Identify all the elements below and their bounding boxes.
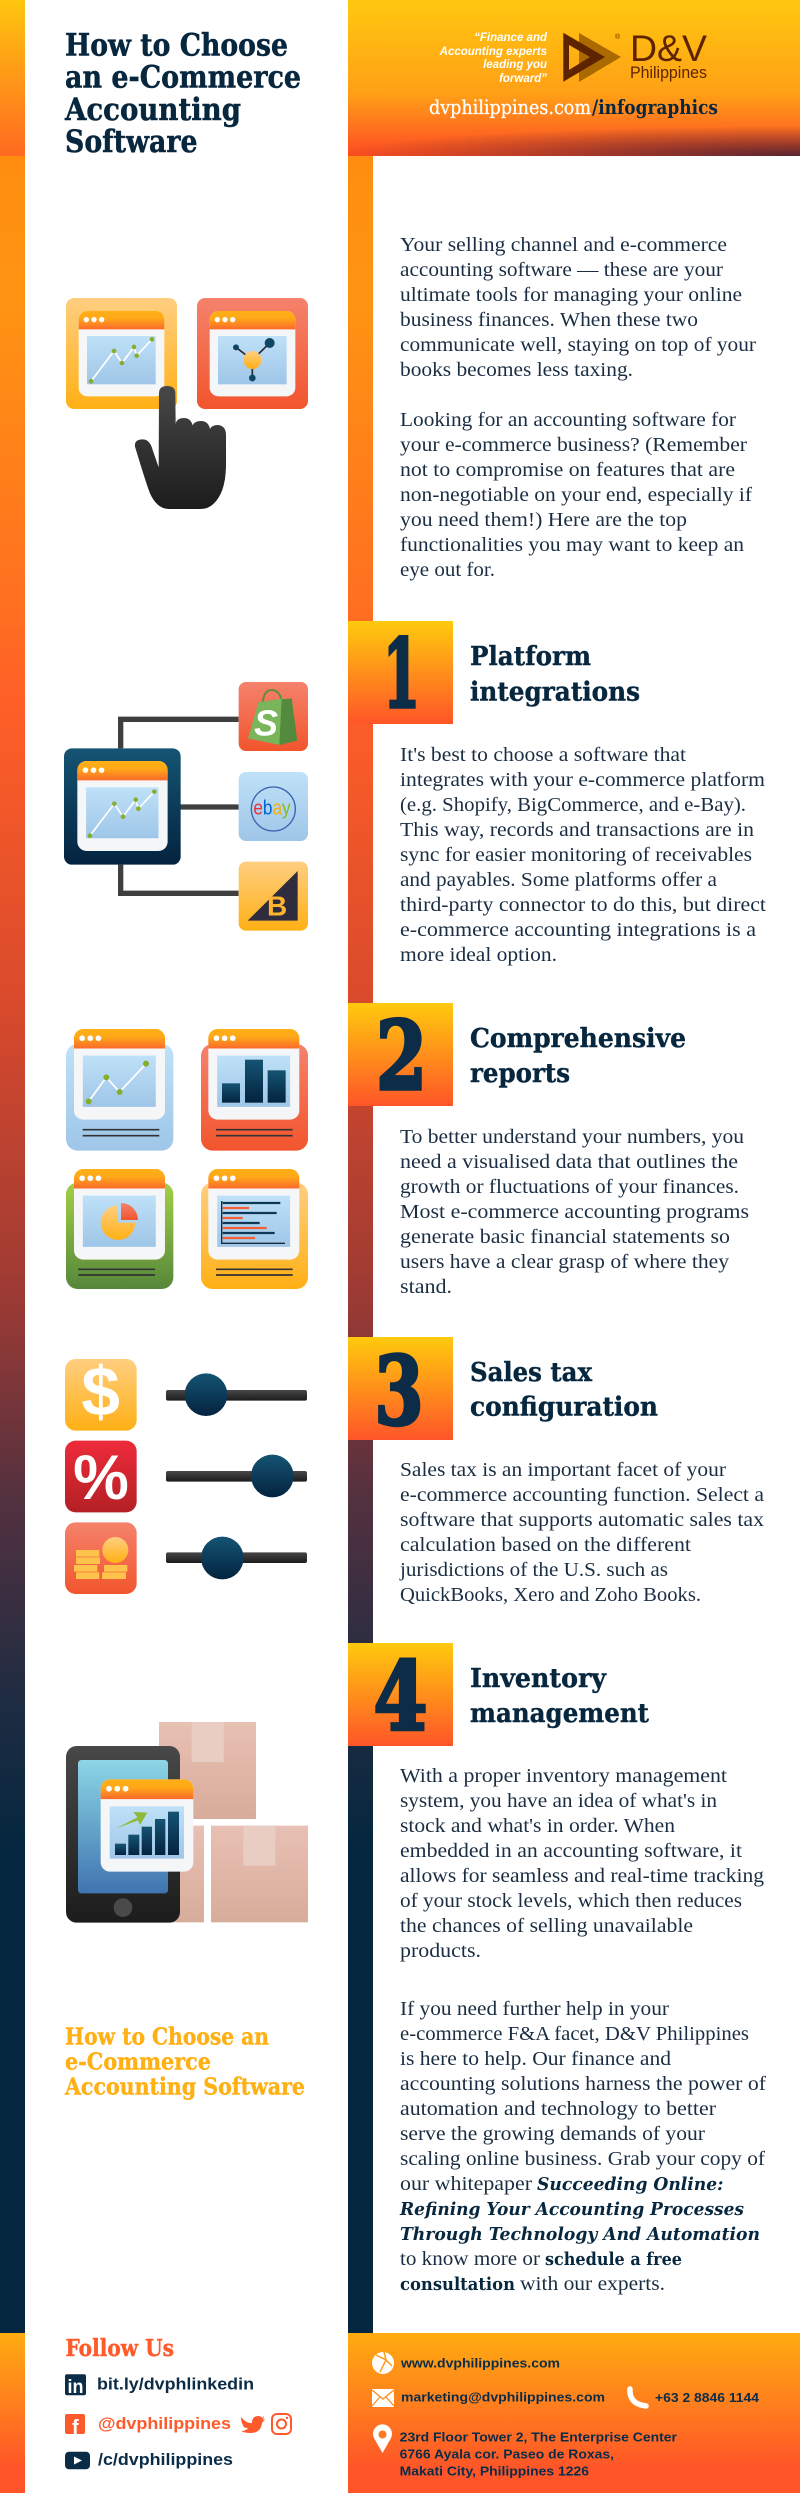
section 3: number badge: 3 (374, 1336, 424, 1447)
main title (64, 28, 301, 160)
section 4: body text: of your stock levels, which then reduces (400, 1890, 742, 1912)
closing paragraph: accounting solutions harness the power of (400, 2073, 766, 2095)
phone row (630, 2389, 760, 2406)
section 2: number badge (348, 1001, 453, 1112)
header band with logo and URL (348, 0, 800, 156)
section 4: body text (400, 1765, 764, 1962)
section 4: heading (470, 1664, 649, 1729)
logo: ® (615, 33, 621, 41)
footer left stripe (0, 2333, 25, 2493)
icon: BigCommerce: B (267, 890, 287, 921)
section 4: body text: allows for seamless and real-time tracking (400, 1865, 764, 1887)
section 1: number badge: 1 (383, 619, 420, 730)
section 4: number badge (348, 1642, 453, 1752)
closing paragraph: schedule a free (545, 2249, 682, 2270)
social handle row: f (72, 2417, 79, 2439)
section 3: heading: Sales tax (470, 1358, 592, 1388)
icon: two app tiles and pointing hand (66, 298, 308, 509)
section 3: number badge (348, 1336, 453, 1447)
intro text: non-negotiable on your end, especially if (400, 484, 752, 506)
closing paragraph: Refining Your Accounting Processes (399, 2199, 744, 2220)
intro text: Your selling channel and e-commerce (400, 234, 727, 256)
website URL (429, 95, 718, 119)
section 4: body text: system, you have an idea of what's in (400, 1790, 717, 1812)
website row (372, 2352, 560, 2374)
section 2: body text: growth or fluctuations of your finances. (400, 1176, 739, 1198)
section 3: body text (399, 1459, 764, 1606)
main title: Accounting (64, 92, 241, 128)
email row (372, 2389, 605, 2407)
section 1: heading: integrations (470, 677, 640, 707)
closing paragraph: is here to help. Our finance and (400, 2048, 671, 2070)
address row: 23rd Floor Tower 2, The Enterprise Center (400, 2430, 677, 2445)
intro text: not to compromise on features that are (400, 459, 735, 481)
section 4: number badge: 4 (374, 1642, 428, 1752)
section 2: body text: generate basic financial statements so (400, 1226, 730, 1248)
intro text: books becomes less taxing. (400, 359, 633, 381)
intro text: you need them!) Here are the top (400, 509, 687, 531)
address row: 6766 Ayala cor. Paseo de Roxas, (400, 2446, 614, 2461)
section 4: body text: embedded in an accounting software, it (400, 1840, 742, 1862)
accounting window tile (64, 748, 181, 865)
icon: dollar tile: $ (81, 1353, 120, 1431)
section 1: body text: more ideal option. (400, 944, 557, 966)
intro text: business finances. When these two (400, 309, 698, 331)
main title: How to Choose (65, 28, 288, 64)
section 3: body text: software that supports automatic sales tax (400, 1509, 764, 1531)
section 4: body text: stock and what's in order. When (400, 1815, 675, 1837)
section 1: body text: It's best to choose a software that (400, 744, 686, 766)
follow us heading: Follow Us (66, 2335, 174, 2362)
tagline (439, 32, 548, 85)
section 3: body text: e-commerce accounting function. Select a (400, 1484, 764, 1506)
intro text: Looking for an accounting software for (400, 409, 736, 431)
icon: Shopify: S (254, 702, 278, 743)
closing paragraph: consultation (400, 2274, 515, 2295)
tagline: forward” (499, 73, 547, 85)
social handle row: @dvphilippines (98, 2414, 231, 2433)
intro text (400, 234, 756, 581)
section 1: body text: and payables. Some platforms offer a (400, 869, 717, 891)
closing paragraph: with our experts. (520, 2273, 665, 2295)
section 3: body text: Sales tax is an important facet of your (400, 1459, 726, 1481)
tile: network window (197, 298, 308, 409)
section 3: heading: configuration (470, 1393, 658, 1423)
top left stripe (0, 0, 25, 156)
section 4: heading: management (470, 1699, 649, 1729)
section 4: body text: products. (400, 1940, 481, 1962)
closing paragraph: serve the growing demands of your (400, 2123, 705, 2145)
logo: D&V (630, 28, 707, 69)
section 3: body text: QuickBooks, Xero and Zoho Books. (400, 1584, 701, 1606)
section 1: body text: integrates with your e-commerce platform (400, 769, 765, 791)
slider 3 (166, 1537, 307, 1579)
closing paragraph: Through Technology And Automation (400, 2224, 760, 2245)
closing paragraph: automation and technology to better (400, 2098, 716, 2120)
website URL: /infographics (592, 95, 718, 119)
youtube row: /c/dvphilippines (98, 2450, 233, 2469)
icon: coins tile (65, 1522, 137, 1594)
closing paragraph (399, 1998, 766, 2295)
card: horizontal bars (201, 1169, 308, 1289)
section 1: body text: e-commerce accounting integrations is a (400, 919, 756, 941)
card: bar chart (201, 1029, 308, 1151)
tagline: leading you (483, 59, 547, 71)
slider 1 (166, 1373, 307, 1416)
section 4: heading: Inventory (470, 1664, 607, 1694)
footer: follow us (65, 2335, 291, 2469)
phone row: +63 2 8846 1144 (655, 2390, 760, 2405)
left gradient stripe (0, 156, 25, 2333)
section 1: body text: third-party connector to do this, but direct (400, 894, 766, 916)
linkedin row (65, 2374, 254, 2398)
icon: BigCommerce (239, 862, 308, 931)
icon: eBay: ebay (253, 797, 291, 819)
logo: Philippines (630, 64, 707, 82)
social handle row (65, 2414, 291, 2439)
linkedin row: in (68, 2377, 84, 2398)
section 2: body text: need a visualised data that outlines the (400, 1151, 738, 1173)
address row (373, 2424, 677, 2478)
illustration: tax sliders (65, 1353, 307, 1594)
closing paragraph: e-commerce F&A facet, D&V Philippines (400, 2023, 749, 2045)
closing paragraph: Succeeding Online: (537, 2174, 724, 2195)
section 1: number badge (348, 619, 453, 730)
tagline: Accounting experts (439, 46, 547, 58)
section 2: body text: users have a clear grasp of where they (400, 1251, 729, 1273)
section 2: body text (400, 1126, 749, 1298)
intro text: communicate well, staying on top of your (400, 334, 756, 356)
intro text: eye out for. (400, 559, 495, 581)
tagline: “Finance and (474, 32, 548, 44)
section 3: body text: jurisdictions of the U.S. such as (399, 1559, 668, 1581)
illustration: platform integrations (64, 682, 308, 931)
logo (563, 28, 707, 82)
section 1: heading: Platform (470, 642, 591, 672)
closing paragraph: If you need further help in your (400, 1998, 669, 2020)
section 4: body text: With a proper inventory management (400, 1765, 727, 1787)
intro text: accounting software — these are your (400, 259, 723, 281)
illustration: report cards (66, 1029, 308, 1289)
section 3: heading (470, 1358, 658, 1423)
section 3: body text: calculation based on the different (400, 1534, 691, 1556)
closing paragraph: to know more or (400, 2248, 540, 2270)
left column orange title repeat: e-Commerce (65, 2048, 211, 2075)
left column orange title repeat: How to Choose an (65, 2024, 269, 2050)
website row: www.dvphilippines.com (400, 2355, 560, 2370)
section 2: heading: Comprehensive (470, 1024, 686, 1054)
tablet (66, 1746, 180, 1923)
linkedin row: bit.ly/dvphlinkedin (97, 2375, 254, 2394)
icon: percent tile: % (73, 1443, 129, 1513)
tile: line chart window (66, 298, 177, 409)
section 2: number badge: 2 (376, 1001, 427, 1112)
section 2: heading (470, 1024, 686, 1089)
section 2: body text: Most e-commerce accounting programs (400, 1201, 749, 1223)
main title: Software (65, 124, 198, 160)
card: pie chart (66, 1169, 173, 1289)
intro text: functionalities you may want to keep an (400, 534, 744, 556)
section 2: body text: To better understand your numbers, you (400, 1126, 744, 1148)
icon: Shopify (239, 682, 308, 751)
icon: eBay (239, 772, 308, 841)
centre gradient stripe (348, 156, 373, 2333)
parcels (107, 1722, 308, 1922)
section 1: body text (400, 744, 766, 966)
closing paragraph: our whitepaper (400, 2173, 532, 2195)
section 1: body text: This way, records and transactions are in (400, 819, 754, 841)
intro text: your e-commerce business? (Remember (400, 434, 747, 456)
illustration: tablet and boxes (66, 1722, 308, 1923)
card: line chart (66, 1029, 173, 1151)
left column orange title repeat: Accounting Software (64, 2073, 305, 2100)
email row: marketing@dvphilippines.com (401, 2389, 605, 2404)
website URL: dvphilippines.com (429, 95, 591, 119)
section 2: body text: stand. (400, 1276, 452, 1298)
icon: hand (135, 386, 226, 509)
growth chart window (101, 1779, 193, 1872)
section 1: body text: sync for easier monitoring of receivables (400, 844, 752, 866)
closing paragraph: scaling online business. Grab your copy of (400, 2148, 765, 2170)
section 4: body text: the chances of selling unavailable (400, 1915, 693, 1937)
section 1: heading (470, 642, 640, 707)
icon: dollar tile (65, 1353, 137, 1431)
main title: an e-Commerce (65, 60, 301, 96)
address row: Makati City, Philippines 1226 (400, 2463, 589, 2478)
left column orange title repeat (64, 2024, 305, 2100)
section 1: body text: (e.g. Shopify, BigCommerce, and e-Bay). (400, 794, 746, 816)
footer: contact panel (348, 2333, 800, 2493)
intro text: ultimate tools for managing your online (400, 284, 742, 306)
section 2: heading: reports (470, 1059, 570, 1089)
slider 2 (166, 1455, 307, 1497)
